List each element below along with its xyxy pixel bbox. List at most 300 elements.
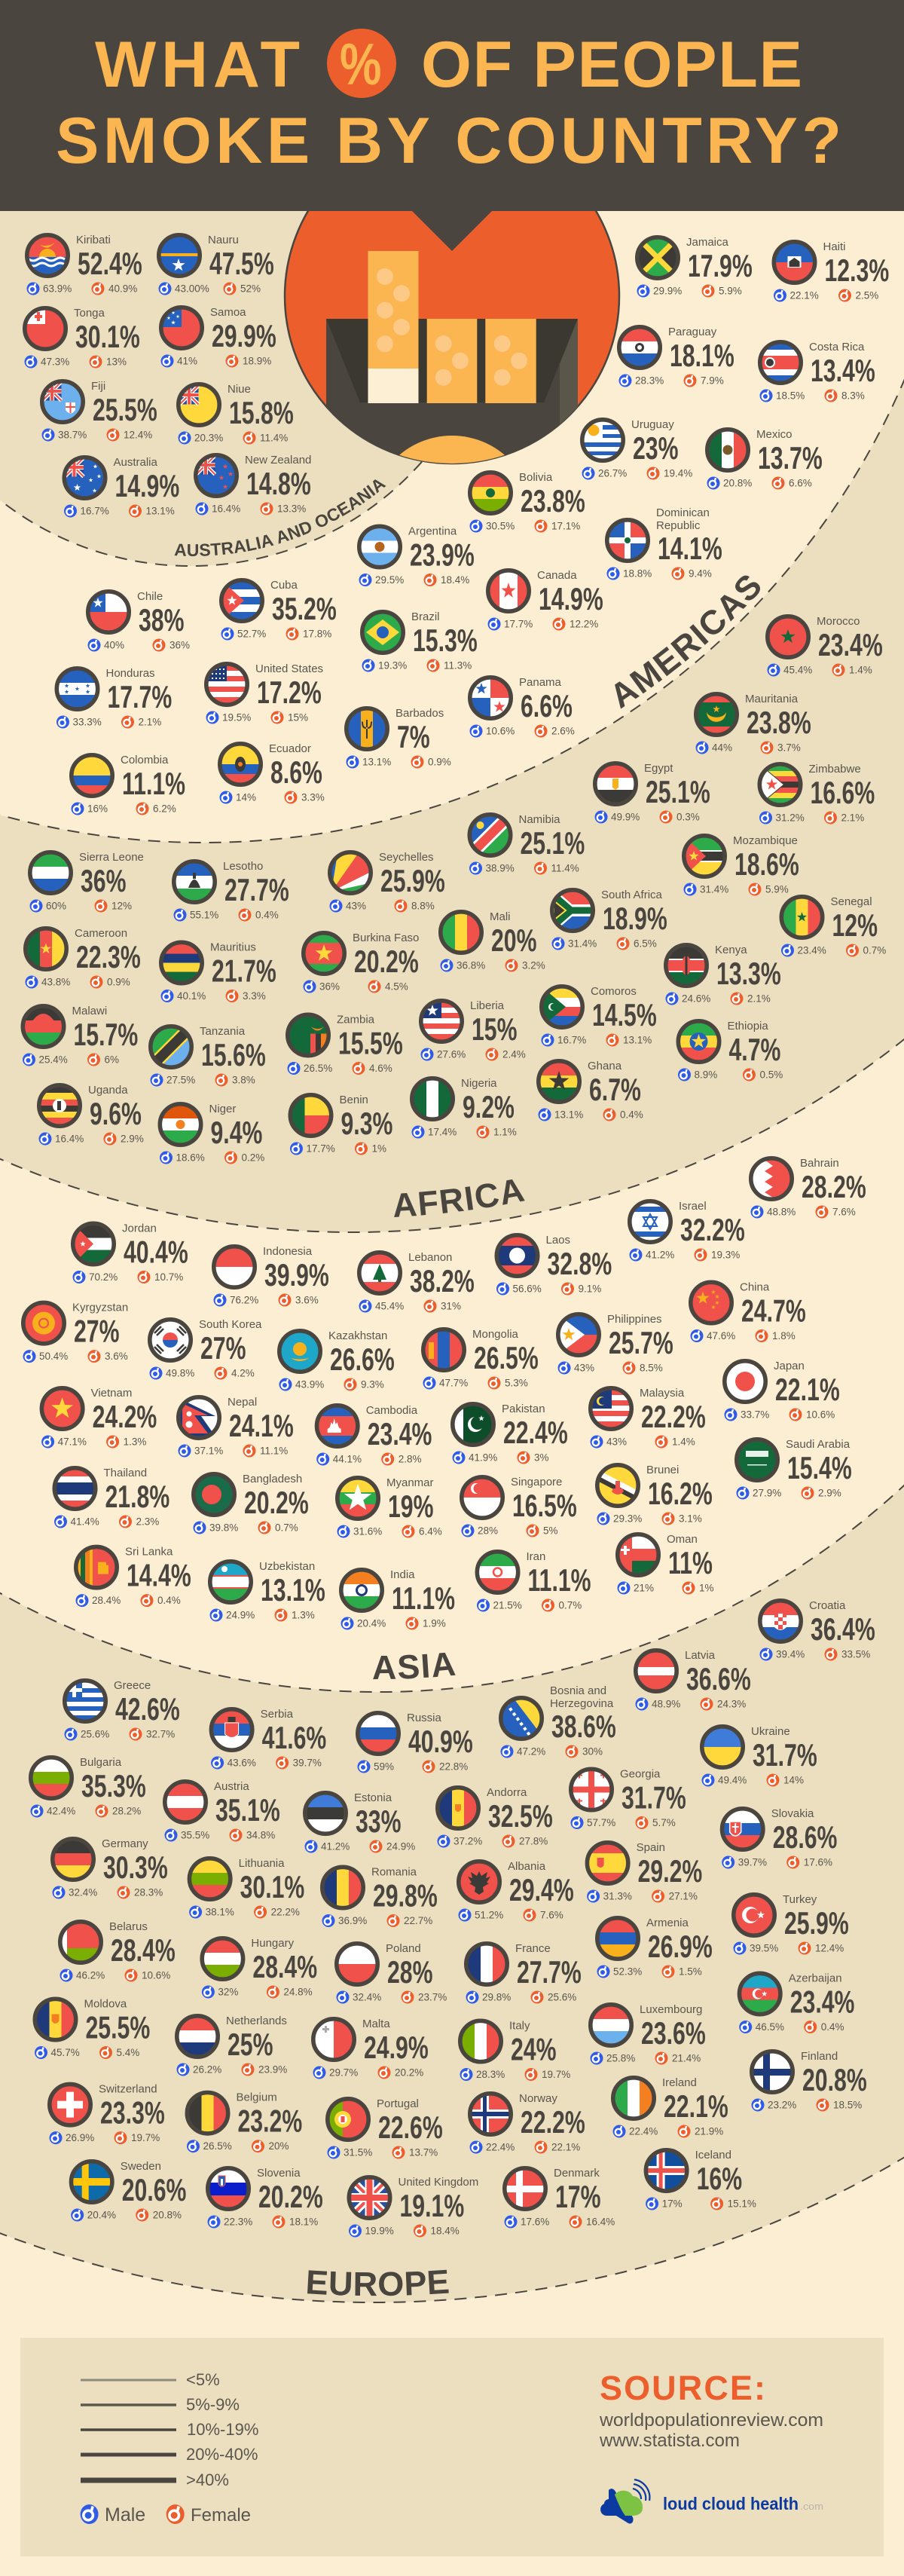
country: Russia: 22.8% [439,1761,468,1773]
country: Zambia: Zambia [337,1013,375,1026]
country: Niue: 11.4% [260,433,288,443]
country: Iran: Iran [526,1550,545,1563]
country: Ecuador: 14% [236,791,256,803]
country: Ethiopia: 8.9% [695,1069,717,1081]
country: Malaysia: Malaysia [640,1387,685,1400]
country: Cambodia: 2.8% [399,1453,421,1465]
country: Burkina Faso: 20.2% [354,944,419,979]
country: Sweden: 20.8% [153,2210,182,2220]
country: Vietnam: 47.1% [58,1436,87,1447]
country: Nepal: 24.1% [229,1408,294,1443]
country: Lesotho: Lesotho [223,860,263,873]
country: Belgium: 20% [268,2140,289,2152]
country: Uzbekistan: 13.1% [261,1572,325,1608]
country: Albania: 51.2% [475,1910,503,1920]
country: Jamaica: 29.9% [653,285,682,297]
country: Croatia: 36.4% [811,1611,875,1647]
country: Uganda: 16.4% [55,1134,84,1144]
country: Niger [160,1103,264,1164]
country: Mauritius: Mauritius [210,941,256,954]
country: Slovenia: 18.1% [289,2216,318,2228]
country: China: China [740,1281,770,1293]
country: Bosnia and Herzegovina: Bosnia and [550,1684,606,1697]
country: Kenya: Kenya [715,944,747,956]
country: India: 20.4% [357,1617,386,1629]
country: Bangladesh: 0.7% [275,1522,298,1533]
country: Austria: 35.1% [215,1792,280,1828]
country: Ghana: 13.1% [554,1109,583,1120]
country: Poland [336,1942,447,2003]
country: Brunei [597,1464,713,1525]
country: Estonia [304,1791,415,1852]
country: Pakistan: 41.9% [469,1452,497,1464]
country: Singapore: 16.5% [512,1488,577,1523]
country: Canada: 17.7% [504,618,533,630]
country: Uzbekistan: 1.3% [292,1610,315,1620]
legend: line weights [81,2370,258,2489]
country: Morocco: Morocco [817,615,860,628]
panel: Americas [54,235,889,846]
panel: legend and source [20,2338,884,2556]
country: Denmark [505,2167,615,2228]
country: Uruguay: 23% [633,430,679,466]
country: Barbados: 13.1% [362,757,391,767]
country: Australia: 16.7% [80,505,109,517]
legend: female [166,2504,251,2526]
country: Niger: 18.6% [176,1152,205,1164]
country: Panama [470,676,575,737]
country: Jamaica: 17.9% [688,248,753,283]
country: Nauru: 52% [240,283,261,294]
country: Saudi Arabia: Saudi Arabia [786,1438,851,1451]
country: Hungary: Hungary [251,1937,295,1950]
country: Poland: 23.7% [418,1991,447,2003]
country: Nauru: Nauru [208,234,239,246]
country: Germany: 28.3% [134,1887,163,1898]
country: Albania: 29.4% [509,1872,574,1908]
country: Lesotho [173,860,289,921]
country: Mexico: 20.8% [723,478,752,488]
country: Chile: Chile [137,590,163,603]
country: United States: United States [255,662,323,675]
country: Brunei: 16.2% [648,1476,713,1511]
text: source urls: worldpopulationreview.com [599,2410,823,2431]
title [56,29,841,177]
country: Lesotho: 55.1% [190,909,218,921]
country: New Zealand [196,454,311,516]
country: Seychelles: 43% [346,900,366,912]
country: Singapore: 5% [543,1525,558,1536]
country: Ecuador [220,742,325,803]
country: Sri Lanka [75,1546,191,1607]
country: Egypt [595,762,710,823]
country: Mongolia: 26.5% [474,1340,539,1375]
country: Bahrain: Bahrain [800,1157,839,1170]
country: Barbados: 0.9% [428,757,451,767]
country: Lebanon: 45.4% [375,1301,404,1311]
legend: line weights: 20%-40% [186,2445,258,2464]
country: Burkina Faso: 36% [319,981,340,992]
country: Barbados [347,707,451,769]
country: Bosnia and Herzegovina: 47.2% [517,1745,545,1758]
country: Liberia: Liberia [470,999,505,1012]
country: Bulgaria: 35.3% [81,1768,146,1804]
country: Sierra Leone [30,851,144,912]
country: Denmark: 17% [555,2179,601,2214]
country: Azerbaijan: 0.4% [821,2021,844,2033]
country: Poland: 32.4% [353,1991,381,2003]
country: Zimbabwe: 31.2% [776,812,805,823]
country: Argentina: Argentina [408,525,457,538]
country: Azerbaijan: 23.4% [790,1984,854,2020]
country: Azerbaijan: Azerbaijan [789,1972,842,1985]
country: Bangladesh: 20.2% [244,1485,309,1520]
country: Colombia: 11.1% [122,766,185,801]
country: Andorra: 32.5% [488,1798,553,1834]
country: Liberia [420,999,526,1061]
country: Mauritius [161,941,276,1002]
country: Russia: 40.9% [408,1724,473,1759]
country: Ghana [538,1060,643,1121]
country: Ireland: 21.9% [695,2125,723,2137]
country: Norway: 22.2% [521,2104,585,2140]
country: Lithuania: Lithuania [239,1857,285,1870]
country: Kenya: 2.1% [747,993,771,1004]
country: Fiji: 38.7% [58,430,87,440]
country: Oman: Oman [667,1533,698,1546]
country: Brazil: Brazil [411,610,440,623]
country: Saudi Arabia: 2.9% [818,1488,841,1498]
country: Tanzania: 27.5% [166,1075,195,1085]
country: Oman [618,1533,714,1595]
country: Jordan [72,1222,188,1283]
text: source urls [599,2410,823,2451]
country: Niue: 20.3% [194,433,223,443]
country: Germany: 30.3% [103,1849,168,1885]
country: Israel: 41.2% [646,1250,674,1260]
country: Pakistan: 3% [534,1452,549,1464]
country: Mauritania: 44% [712,742,732,754]
country: Finland: 18.5% [833,2100,862,2110]
country: Romania: Romania [371,1866,417,1878]
country: United Kingdom: 19.1% [399,2188,464,2223]
country: Albania: 7.6% [540,1910,563,1920]
country: Armenia [597,1917,713,1978]
country: Uzbekistan [209,1560,325,1622]
country: Malawi: Malawi [72,1005,107,1017]
heading: source: SOURCE: [600,2369,765,2407]
country: Nepal [178,1396,294,1458]
country: South Africa: South Africa [601,889,663,901]
country: Japan: Japan [774,1360,805,1372]
country: Indonesia: 39.9% [264,1257,329,1293]
country: Kiribati [27,234,142,295]
country: Moldova: 25.5% [86,2010,150,2045]
country: Turkey: 25.9% [784,1905,849,1941]
country: Bolivia: Bolivia [519,471,553,484]
country: Brunei: 3.1% [679,1513,702,1524]
country: Belgium: 23.2% [238,2103,302,2139]
country: Malta: 29.7% [329,2067,358,2079]
country: Albania [458,1860,574,1922]
country: Seychelles: Seychelles [379,851,434,864]
country: Liberia: 15% [472,1011,518,1047]
country: Jordan: 40.4% [124,1234,188,1270]
country: Sierra Leone: Sierra Leone [79,851,144,864]
country: Malaysia: 43% [606,1436,627,1447]
country: Samoa: 18.9% [243,356,271,366]
country: Uganda: 2.9% [121,1134,144,1144]
country: Uruguay: Uruguay [631,418,674,431]
country: Iceland: Iceland [695,2149,731,2161]
country: Portugal: 13.7% [409,2146,438,2158]
country: Kazakhstan [279,1329,395,1391]
country: Belarus: 28.4% [111,1932,176,1968]
country: Brazil [362,610,478,672]
country: Mexico: Mexico [756,428,793,441]
country: New Zealand: 14.8% [246,466,311,501]
country: Moldova: 5.4% [116,2047,139,2058]
country: Chile: 36% [170,639,190,651]
country: Ireland: Ireland [662,2076,697,2089]
country: Paraguay: Paraguay [668,326,717,338]
country: Mauritania: 3.7% [777,742,801,754]
country: South Korea: 27% [200,1330,246,1366]
logo: loud cloud health [600,2480,823,2524]
country: Israel [630,1200,745,1262]
country: Nepal: Nepal [228,1396,257,1409]
country: Georgia: 57.7% [587,1817,615,1828]
country: Malta: Malta [362,2018,390,2030]
legend: line weights: >40% [186,2470,229,2489]
country: Malta: 24.9% [364,2030,429,2065]
icon: percent badge [327,29,396,98]
text: source urls: www.statista.com [599,2431,740,2451]
country: United Kingdom: 19.9% [365,2225,394,2237]
country: South Africa: 31.4% [568,938,597,950]
country: Cuba [221,579,337,641]
country: Dominican Republic: 18.8% [623,568,652,579]
country: Myanmar: 31.6% [353,1525,382,1537]
country: Slovenia: Slovenia [257,2167,301,2180]
country: Mexico: 6.6% [789,478,812,488]
country: Ghana: 0.4% [620,1109,643,1120]
country: Mozambique: 5.9% [765,883,789,895]
country: South Korea: 4.2% [231,1367,255,1379]
country: Australia [64,456,179,517]
country: Mali: Mali [490,910,511,923]
country: Costa Rica [759,341,875,402]
country: New Zealand: New Zealand [245,454,311,467]
country: Dominican Republic: 9.4% [689,568,712,579]
panel: Asia [21,1156,866,1679]
country: Lebanon [359,1251,475,1313]
country: Ukraine: Ukraine [751,1725,790,1738]
country: Mongolia: 5.3% [505,1378,528,1388]
country: Mauritius: 21.7% [212,953,276,989]
country: Pakistan: 22.4% [503,1415,568,1450]
background: Africa band [0,0,904,1232]
country: Uzbekistan: Uzbekistan [259,1560,315,1573]
country: Ethiopia: 4.7% [729,1032,780,1067]
title: OF PEOPLE [421,29,802,101]
country: Luxembourg: 23.6% [641,2015,706,2051]
country: Benin [290,1094,392,1155]
country: Japan: 33.7% [741,1409,769,1420]
country: Haiti: Haiti [823,240,846,253]
country: Vietnam [41,1387,157,1449]
country: Bulgaria [30,1756,146,1818]
country: South Korea [149,1318,262,1379]
country: Niue [178,383,294,445]
country: Mexico: 13.7% [758,440,823,476]
country: Latvia: 48.9% [652,1699,680,1709]
country: Colombia: Colombia [121,754,169,766]
country: Dominican Republic: 14.1% [658,531,722,566]
country: Indonesia [214,1245,329,1307]
country: Indonesia: Indonesia [263,1245,313,1258]
legend: male [81,2504,145,2526]
country: Costa Rica: 8.3% [841,390,865,401]
country: Slovakia: 17.6% [804,1857,832,1868]
country: Chile [87,590,190,651]
country: Tonga: 47.3% [41,356,69,368]
country: Senegal: 12% [832,907,878,943]
country: Zimbabwe: 2.1% [841,812,864,823]
country: France [466,1942,582,2003]
country: Nigeria: 1.1% [493,1126,517,1138]
country: Thailand: 2.3% [136,1516,159,1527]
country: Costa Rica: Costa Rica [809,341,865,353]
country: Mozambique [684,834,799,895]
country: Finland: 20.8% [802,2062,867,2097]
country: Cuba: Cuba [270,579,298,592]
country: Nauru: 43.00% [175,283,209,294]
country: Cambodia: Cambodia [366,1404,418,1417]
country: Canada: 14.9% [539,581,603,616]
country: France: 29.8% [482,1991,511,2003]
country: Ukraine [702,1725,817,1786]
country: Thailand: Thailand [104,1467,147,1479]
country: Austria [164,1780,280,1842]
country: Armenia: Armenia [646,1917,689,1929]
country: Namibia: Namibia [518,813,560,826]
country: Egypt: 0.3% [676,811,700,823]
icon: percent badge: % [340,31,381,97]
country: Samoa: 41% [177,356,197,366]
country: Brunei: Brunei [646,1464,679,1476]
country: Norway: 22.1% [551,2142,580,2152]
country: Romania: 29.8% [373,1878,438,1914]
country: Kazakhstan: 43.9% [295,1379,324,1390]
country: Canada: Canada [537,569,577,582]
country: Romania [322,1866,438,1927]
country: Croatia [759,1599,875,1661]
country: Ukraine: 14% [783,1774,804,1786]
country: Ukraine: 31.7% [753,1737,817,1773]
country: Austria: Austria [214,1780,249,1793]
country: Panama: 2.6% [551,725,575,737]
country: Senegal: Senegal [830,895,872,908]
background: Asia band [0,145,904,1692]
country: Belarus: 46.2% [76,1970,105,1981]
country: Bahrain: 28.2% [802,1169,866,1204]
country: United States [206,662,323,724]
country: Lithuania: 38.1% [206,1907,234,1917]
country: Sri Lanka: 0.4% [157,1595,181,1606]
country: Fiji: 25.5% [93,392,157,427]
country: Tanzania: Tanzania [200,1025,246,1038]
country: Jordan: 10.7% [154,1271,183,1283]
country: Luxembourg: Luxembourg [640,2003,702,2016]
country: Mauritius: 40.1% [177,990,206,1002]
country: Uganda [39,1084,144,1146]
country: Laos: 32.8% [547,1246,612,1281]
country: Lesotho: 27.7% [224,872,289,907]
country: Tonga: 30.1% [75,319,140,354]
country: Zambia: 4.6% [369,1063,392,1074]
country: Jamaica [637,236,753,297]
country: Albania: Albania [508,1860,546,1873]
country: Haiti: 2.5% [856,289,878,301]
country: United Kingdom: United Kingdom [398,2176,478,2189]
country: Germany [53,1837,168,1899]
country: Benin: 1% [372,1143,386,1155]
country: Laos [496,1234,612,1295]
country: United States: 15% [288,711,308,724]
country: Portugal [327,2097,443,2158]
country: Benin: Benin [339,1094,368,1106]
country: Fiji: 12.4% [124,430,152,440]
country: Tonga: Tonga [74,307,105,320]
country: Armenia: 26.9% [648,1929,713,1964]
country: Mongolia: Mongolia [472,1328,519,1341]
country: Denmark: 17.6% [521,2216,549,2228]
country: Georgia: 31.7% [622,1780,686,1816]
country: Senegal: 23.4% [797,945,826,956]
logo: loud cloud health: .com [800,2501,823,2512]
country: Honduras: 33.3% [72,716,102,728]
country: Bulgaria: 42.4% [47,1806,75,1816]
country: Romania: 22.7% [404,1915,432,1926]
country: Vietnam: 24.2% [93,1399,157,1434]
country: Switzerland [50,2083,165,2144]
country: Bahrain [750,1157,866,1218]
country: Benin: 17.7% [306,1143,335,1155]
country: Canada [488,569,603,630]
country: Luxembourg: 25.8% [606,2053,635,2064]
country: Bangladesh: 39.8% [209,1522,238,1533]
country: Hungary: 28.4% [252,1949,317,1984]
country: Kazakhstan: Kazakhstan [328,1329,387,1342]
country: Kazakhstan: 26.6% [330,1342,395,1377]
country: Bahrain: 7.6% [832,1206,856,1218]
country: Latvia: 36.6% [686,1661,751,1696]
country: Saudi Arabia: 15.4% [787,1450,852,1485]
country: United Kingdom: 18.4% [431,2225,460,2237]
country: Israel: Israel [679,1200,707,1213]
country: Russia: Russia [407,1712,442,1724]
country: Barbados: 7% [397,719,430,754]
country: Cameroon: 0.9% [107,977,130,987]
country: Jordan: 70.2% [89,1271,118,1283]
country: Costa Rica: 13.4% [811,353,875,388]
country: Japan: 10.6% [806,1409,835,1420]
heading: Africa: AFRICA [394,1179,525,1217]
country: United States: 17.2% [257,675,322,710]
country: Malawi: 15.7% [74,1017,138,1052]
country: Switzerland: 26.9% [66,2132,94,2143]
